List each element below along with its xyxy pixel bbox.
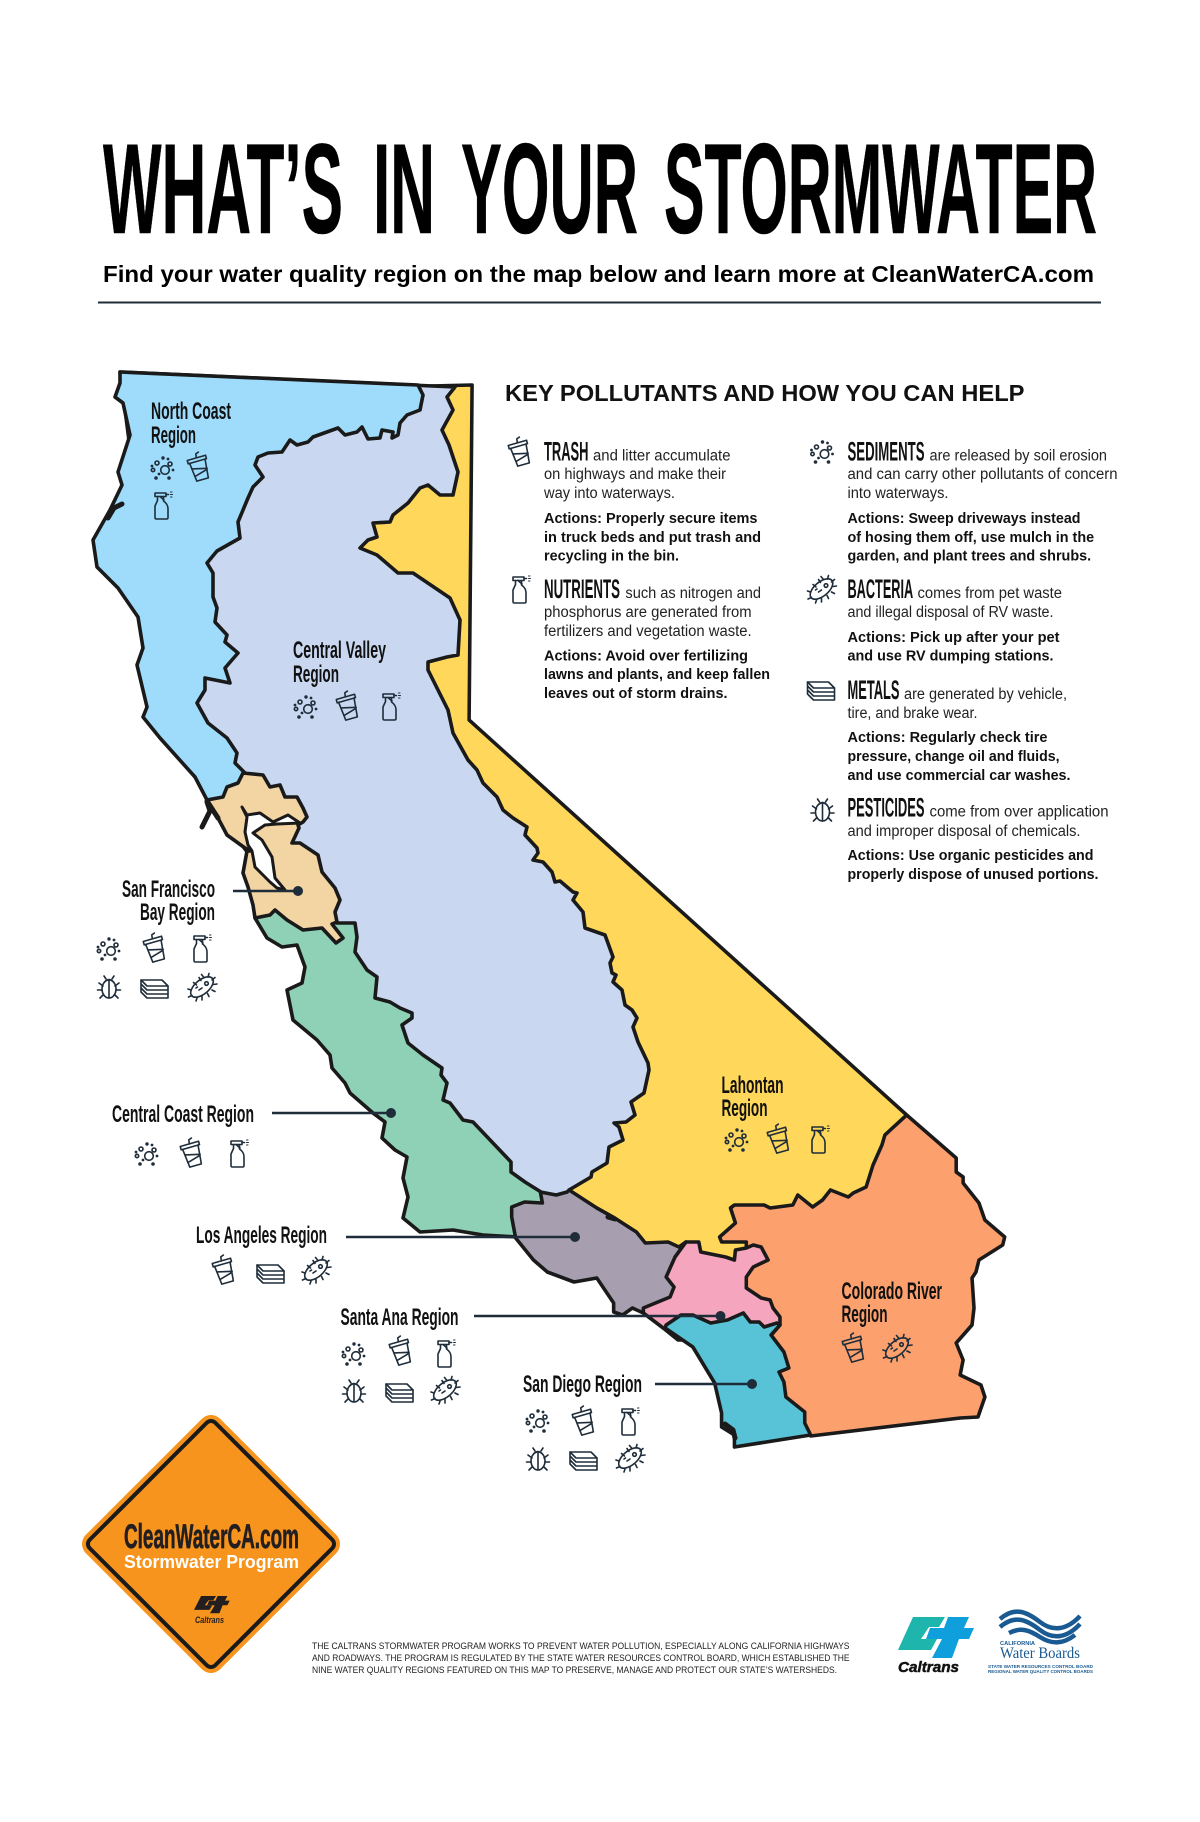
pollutant: trash: recycling in the bin. bbox=[544, 548, 679, 564]
pollutant: nutrients bbox=[513, 574, 770, 702]
logo: Caltrans bbox=[898, 1617, 974, 1676]
title: WHAT’S bbox=[103, 118, 343, 261]
region label: Colorado River bbox=[841, 1278, 942, 1363]
pollutant: nutrients: fertilizers and vegetation waste. bbox=[544, 623, 752, 640]
pollutant: bacteria: and use RV dumping stations. bbox=[848, 648, 1054, 664]
pollutant: trash: and litter accumulate bbox=[593, 448, 730, 464]
pollutant: trash bbox=[507, 435, 761, 564]
road sign: CleanWaterCA.com: Stormwater Program bbox=[124, 1552, 299, 1572]
pollutant: metals: METALS bbox=[848, 675, 900, 705]
pollutant: metals: and use commercial car washes. bbox=[848, 767, 1070, 784]
region label: Los Angeles: Los Angeles Region bbox=[196, 1222, 327, 1249]
pollutant: pesticides: and improper disposal of chemicals. bbox=[848, 823, 1080, 840]
pollutant: metals: tire, and brake wear. bbox=[848, 705, 978, 722]
region label: Central Valley bbox=[293, 637, 400, 721]
footer note: AND ROADWAYS. THE PROGRAM IS REGULATED BY THE STATE WATER RESOURCES CONTROL BOARD, WHICH ESTABLISHED THE bbox=[312, 1653, 850, 1664]
pollutant: nutrients: Actions: Avoid over fertilizing bbox=[544, 648, 748, 664]
region shape: San Diego bbox=[665, 1313, 811, 1447]
pollutant: bacteria: comes from pet waste bbox=[918, 585, 1062, 602]
pollutant: bacteria: Actions: Pick up after your pet bbox=[848, 629, 1060, 646]
pollutant: nutrients: NUTRIENTS bbox=[544, 574, 620, 604]
region shape: Central Coast bbox=[255, 900, 545, 1237]
pollutant: bacteria: BACTERIA bbox=[848, 574, 913, 604]
region label: Santa Ana: Santa Ana Region bbox=[340, 1304, 458, 1331]
pollutant: pesticides: come from over application bbox=[930, 804, 1108, 820]
pollutant: sediments: and can carry other pollutants of concern bbox=[848, 466, 1118, 483]
heading: key pollutants: KEY POLLUTANTS AND HOW YOU CAN HELP bbox=[505, 380, 1024, 406]
pollutant: metals: pressure, change oil and fluids, bbox=[848, 748, 1060, 765]
pollutant: sediments bbox=[811, 436, 1118, 564]
road sign: CleanWaterCA.com bbox=[77, 1410, 345, 1678]
pollutant: metals: are generated by vehicle, bbox=[904, 686, 1067, 703]
pollutant: pesticides: properly dispose of unused portions. bbox=[848, 866, 1098, 883]
region shape: Colorado River bbox=[708, 1115, 1005, 1436]
region label: San Francisco Bay: Bay Region bbox=[140, 899, 215, 926]
region label: San Francisco Bay bbox=[97, 876, 303, 1001]
region label: Lahontan: Region bbox=[722, 1095, 768, 1122]
pollutant: metals bbox=[808, 675, 1070, 784]
logo: California Water Boards: STATE WATER RESOURCES CONTROL BOARD bbox=[988, 1664, 1094, 1669]
region label: Lahontan bbox=[722, 1072, 830, 1154]
logo: California Water Boards: CALIFORNIA bbox=[1000, 1641, 1035, 1647]
subtitle: Find your water quality region on the map below and learn more at CleanWaterCA.com bbox=[103, 261, 1094, 287]
pollutant: bacteria: and illegal disposal of RV waste. bbox=[848, 604, 1054, 621]
region label: Los Angeles bbox=[196, 1222, 580, 1285]
region shape: North Coast bbox=[93, 372, 423, 800]
footer note bbox=[312, 1641, 850, 1676]
region label: Lahontan: Lahontan bbox=[722, 1072, 784, 1099]
pollutant: nutrients: such as nitrogen and bbox=[625, 585, 761, 602]
pollutant: sediments: are released by soil erosion bbox=[930, 448, 1107, 464]
title: YOUR bbox=[461, 118, 638, 261]
region shape: Central Valley bbox=[120, 372, 649, 1205]
pollutant: sediments: SEDIMENTS bbox=[848, 436, 924, 466]
icon: Caltrans logo on sign bbox=[194, 1596, 230, 1625]
pollutant: trash: in truck beds and put trash and bbox=[544, 529, 761, 546]
icon: Caltrans logo on sign: Caltrans bbox=[195, 1615, 224, 1625]
pollutant: bacteria bbox=[807, 574, 1062, 664]
map of California water quality regions bbox=[93, 372, 1005, 1447]
pollutant: pesticides: PESTICIDES bbox=[848, 792, 924, 822]
region label: Colorado River: Colorado River bbox=[842, 1278, 942, 1305]
pollutant: pesticides: Actions: Use organic pesticides and bbox=[848, 847, 1094, 864]
region shape: San Francisco Bay bbox=[207, 773, 343, 943]
pollutant: trash: Actions: Properly secure items bbox=[544, 510, 758, 527]
title: IN bbox=[373, 118, 435, 261]
pollutant: nutrients: leaves out of storm drains. bbox=[544, 685, 728, 702]
logo: California Water Boards bbox=[988, 1612, 1094, 1674]
pollutant: metals: Actions: Regularly check tire bbox=[848, 729, 1048, 746]
region label: San Diego bbox=[523, 1371, 757, 1472]
region shape: Lahontan bbox=[351, 385, 907, 1270]
region label: Central Coast: Central Coast Region bbox=[112, 1101, 254, 1128]
road sign: CleanWaterCA.com: CleanWaterCA.com bbox=[124, 1518, 299, 1556]
region label: San Francisco Bay: San Francisco bbox=[122, 876, 215, 903]
pollutant: trash: on highways and make their bbox=[544, 466, 726, 483]
region label: North Coast: North Coast bbox=[151, 398, 231, 425]
pollutant: trash: way into waterways. bbox=[543, 485, 675, 502]
pollutant: nutrients: phosphorus are generated from bbox=[544, 604, 752, 621]
region label: Santa Ana bbox=[340, 1304, 726, 1404]
pollutant: trash: TRASH bbox=[544, 436, 588, 466]
footer note: NINE WATER QUALITY REGIONS FEATURED ON THIS MAP TO PRESERVE, MANAGE AND PROTECT OUR STATE’S WATERSHEDS. bbox=[312, 1665, 837, 1676]
region label: North Coast bbox=[151, 398, 231, 519]
region label: Central Valley: Central Valley bbox=[293, 637, 386, 664]
footer note: THE CALTRANS STORMWATER PROGRAM WORKS TO PREVENT WATER POLLUTION, ESPECIALLY ALONG CALIFORNIA HIGHWAYS bbox=[312, 1641, 850, 1652]
region shape: Santa Ana bbox=[643, 1242, 780, 1340]
region label: Central Valley: Region bbox=[293, 661, 339, 688]
logo: California Water Boards: Water Boards bbox=[1000, 1645, 1080, 1662]
pollutant: sediments: Actions: Sweep driveways instead bbox=[848, 510, 1080, 527]
San Francisco Bay water bbox=[242, 807, 300, 890]
pollutant: pesticides bbox=[811, 792, 1108, 883]
logo: Caltrans: Caltrans bbox=[898, 1659, 959, 1676]
title bbox=[103, 118, 1097, 261]
region label: North Coast: Region bbox=[151, 422, 196, 449]
region shape: Los Angeles bbox=[512, 1190, 698, 1318]
pollutant: nutrients: lawns and plants, and keep fallen bbox=[544, 666, 770, 683]
region label: Central Coast bbox=[112, 1101, 396, 1168]
region label: San Diego: San Diego Region bbox=[523, 1371, 642, 1398]
pollutant: sediments: garden, and plant trees and shrubs. bbox=[848, 548, 1091, 564]
pollutant: sediments: of hosing them off, use mulch in the bbox=[848, 529, 1094, 546]
region label: Colorado River: Region bbox=[842, 1301, 888, 1328]
pollutant: sediments: into waterways. bbox=[848, 485, 948, 502]
logo: California Water Boards: REGIONAL WATER QUALITY CONTROL BOARDS bbox=[988, 1669, 1093, 1674]
